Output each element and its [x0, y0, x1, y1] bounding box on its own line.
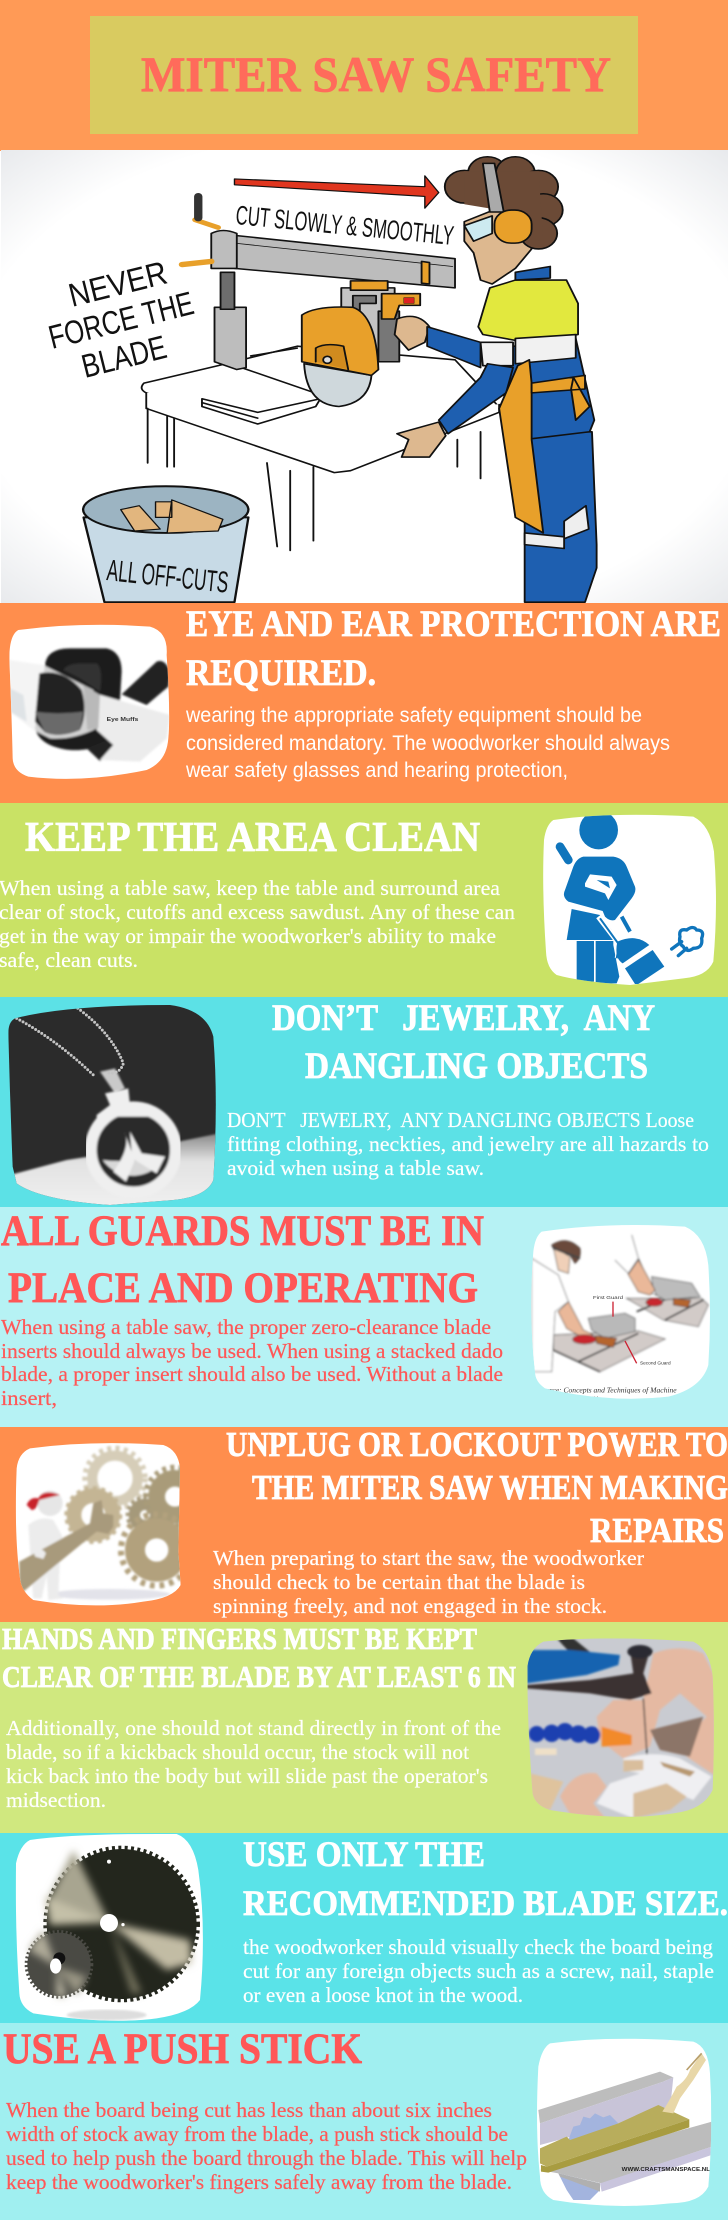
text block: wear safety glasses and hearing protection, [185, 759, 568, 782]
text block: safe, clean cuts. [0, 948, 138, 972]
text block [6, 2098, 527, 2194]
image: hands guiding wood at scroll saw [527, 1638, 714, 1817]
text block [227, 1108, 709, 1180]
text block: Additionally, one should not stand directly in front of the [6, 1716, 501, 1740]
image: push stick through table saw [537, 2038, 712, 2206]
label: never force the blade: FORCE THE [45, 284, 197, 356]
image: operating with guards [531, 1225, 710, 1399]
heading [272, 998, 655, 1087]
panel: header [0, 0, 728, 151]
text block: blade, so if a kickback should occur, the stock will not [6, 1740, 469, 1764]
text block: When using a table saw, the proper zero-clearance blade [1, 1315, 491, 1339]
heading: DANGLING OBJECTS [305, 1046, 648, 1087]
text block: considered mandatory. The woodworker should always [186, 732, 670, 755]
heading [2, 1621, 516, 1694]
text block: midsection. [6, 1788, 106, 1812]
panel: all guards must be in place [0, 1207, 728, 1427]
text block: the woodworker should visually check the board being [243, 1935, 714, 1959]
text block [243, 1935, 714, 2007]
heading: PLACE AND OPERATING [8, 1265, 478, 1312]
panel: keep the area clean [0, 803, 728, 997]
image: operating with guards: Source: Concepts and Techniques of Machine [538, 1385, 677, 1394]
image: safety glasses and ear muffs: Eye Muffs [107, 717, 138, 723]
heading: HANDS AND FINGERS MUST BE KEPT [2, 1621, 477, 1656]
text block: width of stock away from the blade, a push stick should be [6, 2122, 508, 2146]
text block: or even a loose knot in the wood. [243, 1983, 523, 2007]
text block [0, 876, 516, 972]
heading [1, 1208, 484, 1312]
panel: use a push stick [0, 2023, 728, 2220]
text block: wearing the appropriate safety equipment should be [185, 704, 642, 727]
label: all off-cuts: ALL OFF-CUTS [105, 554, 230, 600]
panel: recommended blade size [0, 1830, 728, 2025]
text block: inserts should always be used. When using a stacked dado [1, 1339, 503, 1363]
panel: hands and fingers [0, 1621, 728, 1833]
text block: keep the woodworker's fingers safely away from the blade. [6, 2170, 512, 2194]
text block: When the board being cut has less than about six inches [6, 2098, 492, 2122]
text block: When using a table saw, keep the table and surround area [0, 876, 501, 900]
icon: person sweeping [543, 814, 716, 985]
text block: should check to be certain that the blade is [213, 1570, 585, 1594]
text block: cut for any foreign objects such as a screw, nail, staple [243, 1959, 714, 1983]
heading: CLEAR OF THE BLADE BY AT LEAST 6 IN [2, 1659, 516, 1694]
image: operating with guards: OSHA [583, 1396, 600, 1402]
image: circular saw blades [16, 1834, 203, 2021]
icon: worker [397, 157, 597, 602]
heading: DON’T JEWELRY, ANY [272, 998, 655, 1039]
label: cut slowly and smoothly: CUT SLOWLY & SMOOTHLY [234, 200, 455, 251]
text block: fitting clothing, neckties, and jewelry are all hazards to [227, 1132, 709, 1156]
image: pendant necklace [8, 1005, 216, 1205]
heading: ALL GUARDS MUST BE IN [1, 1208, 484, 1255]
illustration: radial arm saw operator [1, 150, 728, 603]
panel: unplug or lockout power [0, 1426, 728, 1622]
text block: avoid when using a table saw. [227, 1156, 484, 1180]
text block [1, 1315, 503, 1410]
text block [6, 1716, 501, 1812]
heading [243, 1834, 728, 1923]
image: operating with guards: Second Guard [640, 1360, 671, 1366]
arrow: cut direction [234, 176, 439, 208]
icon: saw machine [142, 196, 499, 550]
text block: When preparing to start the saw, the woodworker [213, 1546, 644, 1570]
text block [185, 704, 670, 782]
text block: used to help push the board through the blade. This will help [6, 2146, 527, 2170]
heading: REQUIRED. [186, 653, 376, 694]
heading [186, 604, 721, 694]
heading: KEEP THE AREA CLEAN [25, 815, 480, 861]
image: push stick through table saw: WWW.CRAFTSMANSPACE.NL [622, 2167, 711, 2173]
text block: spinning freely, and not engaged in the stock. [213, 1594, 607, 1618]
text block [213, 1546, 644, 1618]
panel: eye and ear protection [0, 603, 728, 803]
text block: get in the way or impair the woodworker's ability to make [0, 924, 496, 948]
heading [226, 1426, 728, 1550]
text block: blade, a proper insert should also be used. Without a blade [1, 1362, 503, 1386]
heading: USE A PUSH STICK [3, 2026, 363, 2073]
panel: jewelry and dangling objects [0, 997, 728, 1213]
text block: kick back into the body but will slide past the operator's [6, 1764, 488, 1788]
text block: insert, [1, 1386, 57, 1410]
label: never force the blade: BLADE [78, 328, 170, 385]
image: figure with wrench and gears [16, 1443, 181, 1606]
image: safety glasses and ear muffs [9, 624, 170, 779]
image: operating with guards: First Guard [593, 1295, 623, 1301]
heading: USE ONLY THE [243, 1834, 485, 1874]
title: MITER SAW SAFETY [141, 46, 611, 102]
text block: DON'T JEWELRY, ANY DANGLING OBJECTS Loose [227, 1108, 694, 1132]
label: never force the blade: NEVER [65, 254, 171, 314]
label: never force the blade [45, 254, 197, 385]
text block: clear of stock, cutoffs and excess sawdust. Any of these can [0, 900, 516, 924]
icon: off-cuts bucket [83, 486, 248, 602]
